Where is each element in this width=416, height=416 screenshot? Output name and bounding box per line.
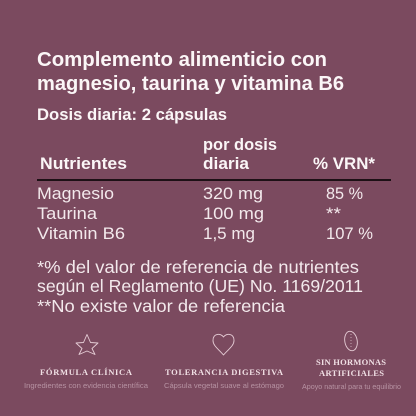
footnotes: según el Reglamento (UE) No. 1169/2011 xyxy=(37,276,363,296)
title: magnesio, taurina y vitamina B6 xyxy=(37,73,344,95)
title xyxy=(37,49,344,95)
table row: Taurina: Taurina xyxy=(37,204,98,223)
heading: tolerancia digestiva: TOLERANCIA DIGESTIVA xyxy=(165,367,284,377)
feature: sin hormonas artificiales xyxy=(302,330,401,391)
daily dose heading: Dosis diaria: 2 cápsulas xyxy=(37,106,227,124)
title: Complemento alimenticio con xyxy=(37,49,327,71)
heading: sin hormonas artificiales: SIN HORMONAS xyxy=(316,357,386,367)
table header: diaria xyxy=(203,154,250,173)
table row: Taurina: 100 mg xyxy=(203,204,264,223)
table row: Vitamin B6: Vitamin B6 xyxy=(37,224,125,243)
table row: Vitamin B6: 107 % xyxy=(326,224,373,243)
footnotes xyxy=(37,257,363,316)
caption: fórmula clínica: Ingredientes con evidencia científica xyxy=(24,381,149,390)
caption: sin hormonas artificiales: Apoyo natural para tu equilibrio xyxy=(302,382,401,391)
table header rule xyxy=(37,179,391,181)
feature: fórmula clínica xyxy=(24,334,149,390)
table row: Magnesio xyxy=(37,184,363,203)
heading: sin hormonas artificiales: ARTIFICIALES xyxy=(319,368,384,378)
table row: Vitamin B6 xyxy=(37,224,373,243)
caption: tolerancia digestiva: Cápsula vegetal suave al estómago xyxy=(164,381,284,390)
icon: star xyxy=(76,334,98,354)
table row: Taurina xyxy=(37,204,341,223)
table row: Magnesio: 85 % xyxy=(326,184,363,203)
table header: por dosis xyxy=(203,135,277,154)
icon: capsule xyxy=(343,330,359,352)
icon: heart xyxy=(213,334,234,355)
table header xyxy=(40,135,375,173)
feature: tolerancia digestiva xyxy=(164,334,284,390)
table row: Magnesio: Magnesio xyxy=(37,184,114,203)
table header: Nutrientes xyxy=(40,154,127,173)
table row: Magnesio: 320 mg xyxy=(203,184,263,203)
nutrition table xyxy=(37,135,391,243)
table row: Taurina: ** xyxy=(326,204,341,223)
table header: % VRN* xyxy=(313,154,375,173)
footnotes: **No existe valor de referencia xyxy=(37,296,285,316)
heading: sin hormonas artificiales xyxy=(316,357,386,378)
table row: Vitamin B6: 1,5 mg xyxy=(203,224,255,243)
footnotes: *% del valor de referencia de nutrientes xyxy=(37,257,359,277)
heading: fórmula clínica: FÓRMULA CLÍNICA xyxy=(40,367,133,377)
